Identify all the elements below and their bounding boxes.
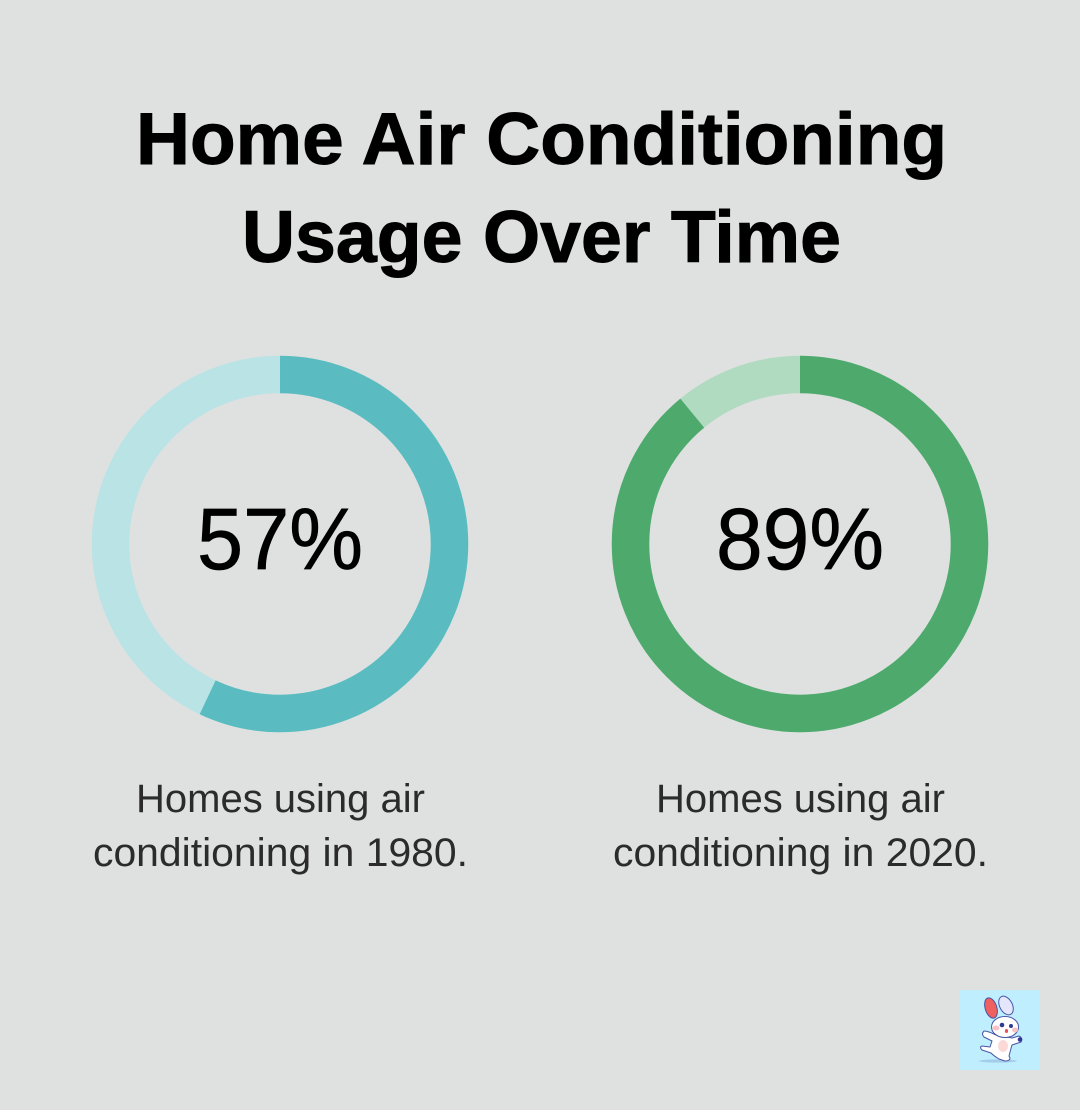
caption: 2020	[613, 777, 988, 875]
panel: 1980 statistic	[93, 374, 468, 875]
caption: 1980: conditioning in 1980.	[93, 831, 468, 875]
title: Usage Over Time	[242, 197, 841, 278]
panel: 2020 statistic	[613, 374, 988, 875]
donut chart: 57%	[110, 374, 450, 714]
caption: 2020: conditioning in 2020.	[613, 831, 988, 875]
icon: running rabbit logo	[960, 990, 1040, 1070]
caption: 2020: Homes using air	[656, 777, 945, 821]
caption: 1980: Homes using air	[136, 777, 425, 821]
title: Home Air Conditioning	[136, 99, 947, 180]
title	[136, 99, 947, 278]
value: 89%: 89%	[716, 491, 884, 588]
caption: 1980	[93, 777, 468, 875]
value: 57%: 57%	[197, 491, 363, 588]
donut chart: 89%	[630, 374, 970, 714]
